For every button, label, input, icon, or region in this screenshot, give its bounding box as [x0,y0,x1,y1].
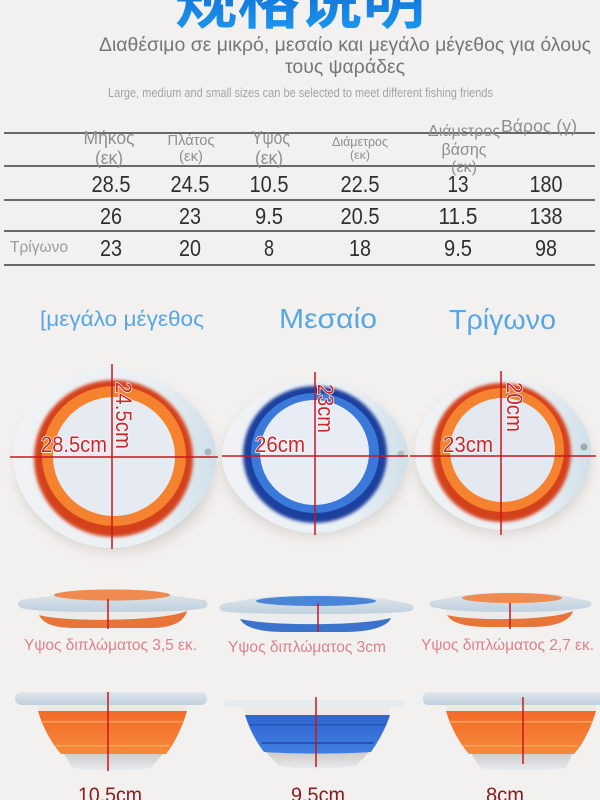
size table [4,116,595,265]
open view: medium [224,697,406,768]
row: medium: 11.5 [438,203,478,229]
row: triangle: 20 [179,235,201,261]
row: triangle: Τρίγωνο [10,239,68,256]
row: medium: 26 [100,203,122,229]
row: triangle: 9.5 [444,235,472,261]
top view: medium blue basin [222,372,408,536]
height marker [315,697,317,767]
top view: large orange basin [10,364,218,552]
folded view: large [18,590,208,629]
measure lines [410,371,596,535]
heading: medium: Μεσαίο [279,303,377,334]
folded label: small: Υψος διπλώματος 2,7 εκ. [421,637,594,654]
subtitle [99,35,591,78]
width label: 26cm [255,432,305,457]
height marker [522,697,524,764]
folded label: large: Υψος διπλώματος 3,5 εκ. [24,637,197,654]
row: medium: 23 [179,203,201,229]
table header: Διάμετρος [428,123,500,140]
table header: Πλάτος [168,132,214,149]
width label: 28.5cm [41,432,107,457]
row: large: 180 [530,171,562,197]
table header: Υψος [252,128,290,148]
row: large [92,171,562,197]
table header: Βάρος (γ) [501,116,577,136]
folded view: medium [220,595,414,632]
height marker [509,603,511,629]
row: triangle: 98 [535,235,557,261]
table header: (εκ) [451,159,477,176]
height marker [107,599,109,629]
row: large: 24.5 [170,171,210,197]
table rules [4,133,595,265]
table header: (εκ) [350,150,370,162]
table header: (εκ) [95,148,123,168]
table header [84,116,577,176]
heading: large: [μεγάλο μέγεθος [40,307,204,331]
open view: large [15,692,207,771]
row: triangle: 18 [349,235,371,261]
row: triangle: 8 [264,235,274,261]
row: medium: 138 [530,203,562,229]
top view: small orange basin [410,371,596,535]
row: large: 22.5 [340,171,380,197]
row: medium: 20.5 [340,203,380,229]
table header: (εκ) [179,148,203,165]
row: large: 10.5 [250,171,288,197]
english caption: Large, medium and small sizes can be selected to meet different fishing friends [108,86,493,100]
row: large: 28.5 [92,171,130,197]
row: triangle [10,235,557,261]
table header: (εκ) [255,148,283,168]
heading: triangle: Τρίγωνο [449,304,556,335]
subtitle: τους ψαράδες [285,57,405,78]
row: medium: 9.5 [255,203,283,229]
height marker [107,692,109,771]
table header: Διάμετρος [332,135,388,149]
depth label: 20cm [502,382,527,432]
width label: 23cm [443,432,493,457]
folded view: small [430,592,592,629]
depth label: 24.5cm [111,382,136,449]
measure lines [10,364,218,549]
row: triangle: 23 [100,235,122,261]
table header: Μήκος [84,128,135,148]
row: medium [100,203,562,229]
depth label: 23cm [313,384,338,433]
measure lines [222,372,408,535]
table header: βάσης [442,140,486,159]
height marker [317,603,319,632]
open view: small [423,692,600,770]
row: large: 13 [448,171,468,197]
folded label: medium: Υψος διπλώματος 3cm [228,639,386,656]
subtitle: Διαθέσιμο σε μικρό, μεσαίο και μεγάλο μέγεθος για όλους [99,35,591,56]
